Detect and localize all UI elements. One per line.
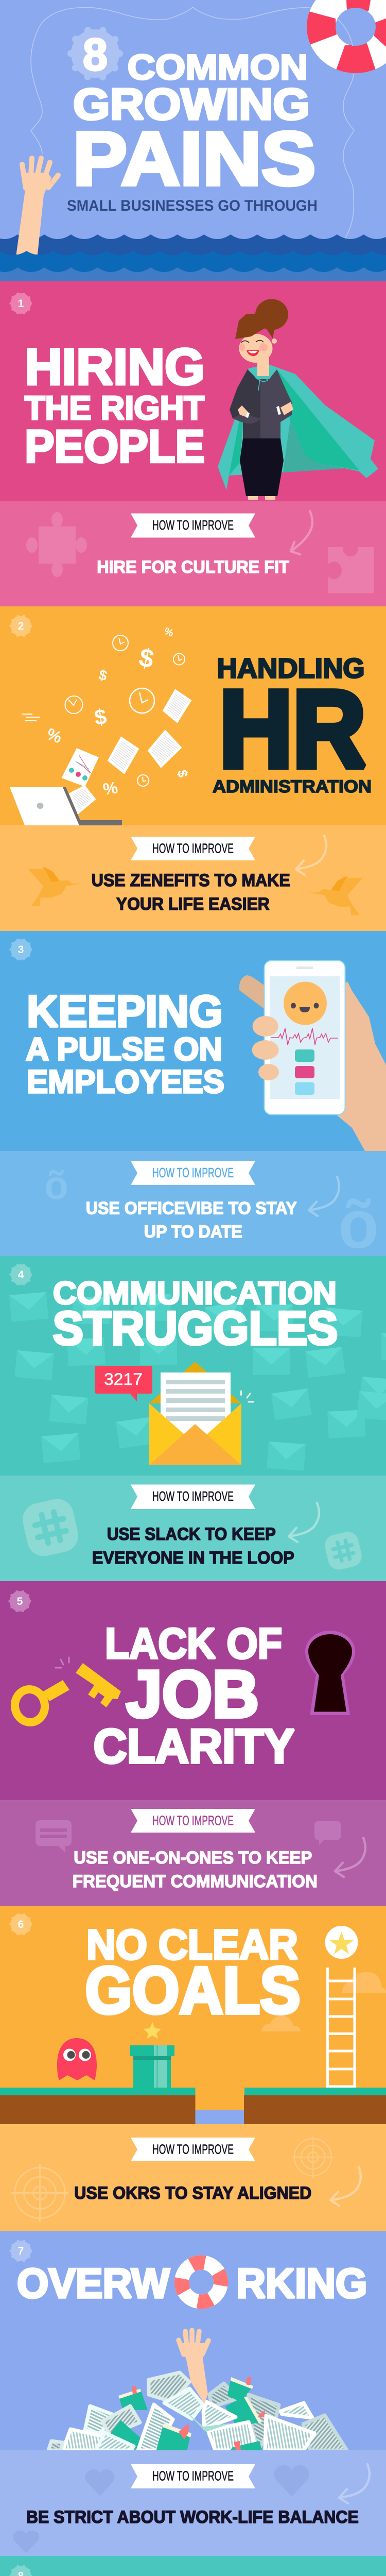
panel: how to improve 6	[0, 2124, 386, 2231]
tip text: USE OKRS TO STAY ALIGNED	[74, 2183, 311, 2203]
clouds	[261, 1972, 386, 2031]
panel background	[0, 1151, 386, 1256]
notification bubble	[95, 1366, 152, 1401]
heading	[25, 338, 205, 472]
heading: HANDLING	[217, 653, 364, 684]
number badge 5	[9, 1591, 30, 1612]
panel: how to improve 7	[0, 2450, 386, 2556]
icon: target left	[11, 2164, 68, 2222]
icon: origami bird left	[28, 867, 82, 906]
icon: ghost	[57, 2038, 97, 2080]
icons: documents	[71, 691, 190, 812]
number badge 3: 3	[18, 944, 24, 956]
heading: COMMUNICATION	[53, 1276, 337, 1311]
smiley face	[284, 982, 327, 1025]
tip text	[73, 1848, 318, 1891]
illustration: open envelope	[149, 1362, 241, 1465]
tip text: USE OFFICEVIBE TO STAY	[86, 1199, 297, 1218]
panel background	[0, 1476, 386, 1581]
number badge 2	[10, 616, 31, 636]
number badge 1: 1	[18, 298, 24, 310]
heading: EMPLOYEES	[27, 1064, 224, 1100]
illustration: woman with cape	[218, 299, 378, 500]
icon: star in circle	[325, 1926, 358, 1959]
panel background	[0, 2450, 386, 2556]
tip text: USE SLACK TO KEEP	[107, 1524, 276, 1544]
pulse line	[271, 1028, 338, 1045]
icon: life ring	[304, 0, 386, 77]
icons: dollar and percent signs: $	[93, 704, 108, 730]
panel: 4 communication struggles	[0, 1256, 386, 1476]
illustration: phone	[265, 960, 345, 1115]
ribbon: how to improve: HOW TO IMPROVE	[152, 841, 234, 856]
tip text: USE ZENEFITS TO MAKE	[92, 871, 290, 890]
heading: THE RIGHT	[25, 389, 204, 427]
arrow	[291, 511, 312, 554]
number badge 8: 8	[83, 29, 108, 80]
ribbon: how to improve	[131, 513, 255, 538]
tip text	[92, 1524, 294, 1568]
heading: NO CLEAR	[86, 1922, 298, 1969]
section background	[0, 2556, 386, 2576]
heading	[17, 2261, 367, 2307]
background envelopes	[9, 1292, 386, 1471]
tip text: UP TO DATE	[144, 1222, 242, 1242]
ribbon: how to improve: HOW TO IMPROVE	[152, 517, 234, 533]
ribbon: how to improve	[131, 2464, 255, 2488]
ribbon: how to improve: HOW TO IMPROVE	[152, 1165, 234, 1180]
panel background	[0, 501, 386, 606]
icon: slack right	[323, 1530, 364, 1572]
icons: dollar and percent signs: $	[136, 642, 156, 674]
front wave	[0, 267, 386, 281]
subtitle: SMALL BUSINESSES GO THROUGH	[67, 197, 318, 214]
heading: JOB	[126, 1657, 259, 1731]
icon: puzzle left	[26, 512, 87, 577]
tip text: BE STRICT ABOUT WORK-LIFE BALANCE	[26, 2507, 359, 2527]
heading	[52, 1276, 338, 1355]
arrow	[296, 836, 326, 875]
section background	[0, 931, 386, 1151]
icon: officevibe mark small: õ	[44, 1162, 68, 1208]
panel: 3 keeping a pulse	[0, 931, 386, 1151]
heading: HIRING	[25, 338, 205, 395]
app buttons	[295, 1049, 314, 1095]
illustration: paper pile	[48, 2372, 347, 2450]
title: COMMON	[128, 47, 308, 87]
number badge 7	[10, 2241, 31, 2261]
title	[73, 47, 316, 201]
icon: pipe	[130, 2045, 174, 2088]
number badge 5: 5	[17, 1596, 23, 1607]
panel: 7 overworking	[0, 2231, 386, 2450]
icon: star	[144, 2022, 161, 2039]
illustration: hand behind phone	[239, 975, 386, 1151]
ribbon: how to improve	[131, 1161, 255, 1185]
ribbon: how to improve	[131, 2138, 255, 2161]
heading	[94, 1619, 294, 1773]
heading: HR	[219, 668, 366, 790]
icons: dollar and percent signs: %	[163, 625, 175, 639]
icons: dollar and percent signs: $	[174, 769, 191, 779]
sparks	[241, 1391, 253, 1402]
icon: puzzle right	[326, 540, 374, 594]
section background	[0, 1581, 386, 1800]
title: GROWING	[73, 80, 310, 129]
arrow	[289, 1503, 319, 1542]
panel: how to improve 2	[0, 825, 386, 931]
number badge 7: 7	[18, 2245, 24, 2257]
tip text: USE ONE-ON-ONES TO KEEP	[74, 1848, 312, 1868]
panel: 8 staying competitive	[0, 2556, 386, 2576]
heading: A PULSE ON	[26, 1031, 222, 1067]
heading	[85, 1922, 301, 2028]
icon: drowning hand	[16, 158, 58, 255]
ribbon: how to improve: HOW TO IMPROVE	[152, 1488, 234, 1504]
ground	[0, 2088, 386, 2124]
section background	[0, 2231, 386, 2450]
icon: life ring letter O	[174, 2256, 228, 2309]
icons: dollar and percent signs: $	[97, 667, 109, 684]
ribbon: how to improve	[131, 1485, 255, 1509]
icon: speech bubble left	[36, 1820, 72, 1853]
section background	[0, 1256, 386, 1476]
heading: STRUGGLES	[52, 1302, 338, 1355]
heading: PEOPLE	[25, 420, 205, 472]
panel: 6 no clear goals	[0, 1906, 386, 2124]
ribbon: how to improve: HOW TO IMPROVE	[152, 2141, 234, 2157]
icon: origami bird right	[309, 876, 363, 915]
section background	[0, 606, 386, 825]
heading: CLARITY	[94, 1719, 294, 1773]
heading: OVERW	[17, 2261, 170, 2307]
heading: LACK OF	[105, 1619, 282, 1668]
section background	[0, 1906, 386, 2124]
wavy frame line	[31, 7, 354, 238]
icon: ladder	[327, 1968, 355, 2088]
panel: 2 handling HR	[0, 606, 386, 825]
ribbon: how to improve	[131, 1809, 255, 1833]
tip text	[92, 871, 290, 914]
arrow	[309, 1177, 339, 1216]
tip text: EVERYONE IN THE LOOP	[92, 1548, 294, 1568]
tip text: FREQUENT COMMUNICATION	[73, 1872, 318, 1891]
icon: officevibe mark large: õ	[338, 1187, 379, 1263]
title: PAINS	[73, 116, 316, 201]
panel: 5 lack of job clarity	[0, 1581, 386, 1800]
icons: hearts	[13, 2465, 309, 2553]
icons: dollar and percent signs: %	[102, 778, 119, 799]
panel: 1 hiring	[0, 281, 386, 501]
panel: how to improve 1	[0, 501, 386, 606]
ribbon: how to improve: HOW TO IMPROVE	[152, 1812, 234, 1828]
number badge 4	[10, 1264, 31, 1285]
heading	[26, 987, 224, 1100]
heading: ADMINISTRATION	[213, 777, 372, 796]
section background	[0, 281, 386, 501]
heading: KEEPING	[27, 987, 223, 1037]
panel background	[0, 825, 386, 931]
tip text: YOUR LIFE EASIER	[116, 894, 270, 914]
icons: clocks	[65, 635, 185, 786]
tip text	[86, 1199, 297, 1242]
arrow	[330, 2167, 361, 2206]
arrow	[339, 2464, 370, 2503]
number badge 6: 6	[18, 1919, 24, 1930]
middle wave	[0, 251, 386, 281]
icon: keyhole	[305, 1631, 355, 1715]
speed lines	[22, 714, 40, 721]
icon: speech bubble right	[314, 1821, 341, 1845]
tip text: HIRE FOR CULTURE FIT	[97, 557, 289, 577]
heading: GOALS	[85, 1954, 301, 2028]
ribbon: how to improve	[131, 837, 255, 860]
number badge 2: 2	[18, 620, 24, 632]
panel: hero	[0, 0, 386, 281]
number badge 8	[10, 2566, 31, 2576]
number badge 6	[10, 1914, 31, 1935]
panel background	[0, 1800, 386, 1906]
icon: laptop	[10, 787, 122, 825]
panel: how to improve 5	[0, 1800, 386, 1906]
icons: dollar and percent signs: %	[44, 724, 64, 747]
illustration: raised hand	[179, 2330, 208, 2404]
arrow	[335, 1838, 365, 1877]
icon: report page	[62, 748, 99, 787]
illustration: fingers	[252, 1016, 279, 1080]
icon: slack left	[20, 1496, 81, 1560]
dark wave	[0, 234, 386, 281]
icon: broken key	[13, 1657, 121, 1724]
ribbon: how to improve: HOW TO IMPROVE	[152, 2468, 234, 2483]
panel: how to improve 4	[0, 1476, 386, 1581]
icon: target right	[292, 2136, 334, 2178]
number badge 4: 4	[18, 1269, 24, 1281]
panel background	[0, 2124, 386, 2231]
number badge 3	[10, 939, 31, 960]
number badge 1	[10, 293, 31, 314]
notification bubble: 3217	[104, 1370, 143, 1388]
heading: RKING	[236, 2261, 367, 2307]
hero background	[0, 0, 386, 281]
panel: how to improve 3	[0, 1151, 386, 1263]
number badge 8	[71, 29, 119, 80]
icons: dollar and percent signs	[44, 625, 191, 799]
